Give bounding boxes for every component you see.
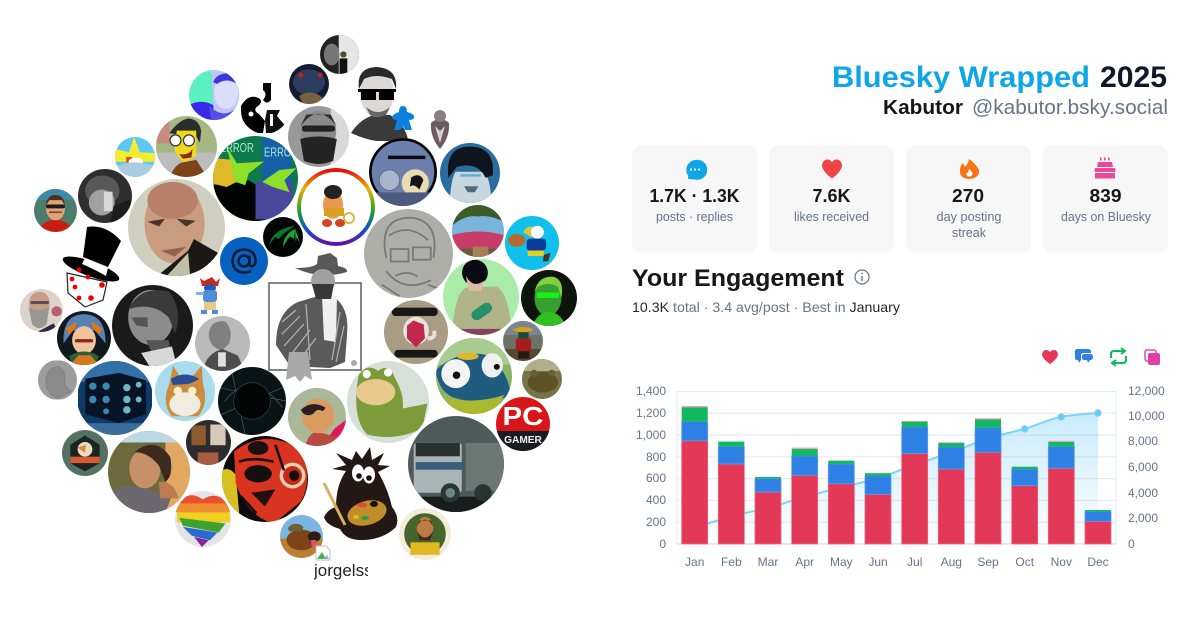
avatar: green claw error screen <box>213 136 298 221</box>
right axis labels: 10,000 <box>1128 409 1165 423</box>
left axis labels: 1,000 <box>636 428 666 442</box>
avatar: cartoon tiger <box>155 361 215 421</box>
month labels: Dec <box>1087 555 1109 569</box>
avatar: enamel cat pin <box>384 300 448 364</box>
avatar: man-at-arms cartoon <box>57 311 111 365</box>
card: likes received: 7.6K <box>812 186 850 206</box>
avatar: grey bearded man with sunglasses <box>288 106 349 167</box>
icon: blue meeple <box>392 106 414 130</box>
avatar: rainbow heart <box>175 491 231 547</box>
user name and handle: Kabutor <box>883 97 963 119</box>
panel: avatar bubble cluster <box>20 35 577 580</box>
icon: Bluey with santa hat <box>194 274 224 316</box>
icon: broken image placeholder <box>316 546 330 560</box>
month labels: Feb <box>721 555 742 569</box>
avatar: PC Gamer logo: GAMER <box>504 435 542 446</box>
avatar: green frog plush <box>347 361 429 443</box>
avatar: top hat dice <box>60 222 124 312</box>
month labels: Nov <box>1051 555 1072 569</box>
heading: your engagement: Your Engagement <box>632 265 844 292</box>
card: posts and replies: posts · replies <box>656 210 733 224</box>
user name and handle <box>883 97 1168 119</box>
avatar: bald man with aviators <box>288 388 346 446</box>
month labels: May <box>830 555 853 569</box>
card: days on Bluesky <box>1043 145 1168 253</box>
icon: grey wizard shield <box>430 110 450 149</box>
left axis labels: 400 <box>646 493 666 507</box>
right axis labels: 8,000 <box>1128 434 1158 448</box>
avatar: cartoon football ram <box>505 216 559 270</box>
right axis labels <box>1128 384 1165 551</box>
card: day posting streak: day posting <box>936 210 1002 224</box>
left axis labels: 0 <box>659 537 666 551</box>
card: days on Bluesky: days on Bluesky <box>1061 210 1152 224</box>
month labels: Aug <box>941 555 962 569</box>
icon: quotes legend <box>1145 350 1160 365</box>
icon: reposts legend <box>1111 348 1126 366</box>
chart legend icons <box>1042 348 1160 366</box>
month labels: Sep <box>977 555 999 569</box>
avatar: eagle badge <box>62 430 108 476</box>
avatar: green leaf logo <box>263 217 303 257</box>
avatar: olive toad <box>522 359 562 399</box>
avatar: at sign on blue <box>220 237 268 285</box>
avatar: grey woman with camera <box>78 169 132 223</box>
left axis labels: 200 <box>646 515 666 529</box>
engagement summary: 10.3K total · 3.4 avg/post · Best in January <box>632 299 900 315</box>
avatar: duotone purple man <box>189 70 239 120</box>
avatar: dark monster <box>289 64 329 104</box>
right axis labels: 12,000 <box>1128 384 1165 398</box>
avatar: german shepherd dog <box>280 515 323 558</box>
left axis labels: 600 <box>646 471 666 485</box>
right axis labels: 6,000 <box>1128 460 1158 474</box>
avatar: neon green skull face <box>521 270 577 326</box>
avatar: pink flowers under a tree <box>452 205 504 257</box>
icon: red heart <box>822 160 842 178</box>
icon: orange flame <box>960 159 979 179</box>
avatar: black and white ink figure <box>240 82 290 134</box>
avatar: dark sphere <box>218 367 286 435</box>
avatar: old man with grey beard <box>20 289 63 332</box>
avatar: blue bug-eyed creature <box>436 338 512 414</box>
card: day posting streak: streak <box>952 226 987 240</box>
month labels: Jul <box>907 555 922 569</box>
right axis labels: 2,000 <box>1128 511 1158 525</box>
icon: info <box>855 270 869 284</box>
card: day posting streak: 270 <box>952 186 984 206</box>
avatar: black and white face <box>320 35 359 74</box>
avatar: man with pixel sunglasses <box>351 67 408 141</box>
card: days on Bluesky: 839 <box>1090 186 1122 206</box>
avatar: PC Gamer logo: PC <box>502 403 544 431</box>
user name and handle: @kabutor.bsky.social <box>972 97 1168 119</box>
icon: speech bubble <box>686 160 707 180</box>
avatar: grey engraved portrait <box>195 316 250 371</box>
avatar: Remy Lebeau badge <box>399 508 451 560</box>
bars: replies-likes-reposts-quotes by month <box>682 406 1111 544</box>
avatar: pencil sketch <box>364 209 453 298</box>
month labels: Jan <box>685 555 704 569</box>
title: 2025 <box>1100 61 1167 94</box>
avatar: red robot mask <box>222 436 308 522</box>
avatar: glowing blue dice <box>78 361 152 435</box>
panel: wrapped stats and engagement <box>620 0 1200 630</box>
avatar: jester cartoon <box>115 137 155 177</box>
avatar: pixel art pirate <box>503 321 543 361</box>
right axis labels: 0 <box>1128 537 1135 551</box>
card: posts and replies <box>632 145 757 253</box>
avatar: man in red shirt with glasses <box>34 189 77 232</box>
left axis labels: 800 <box>646 450 666 464</box>
card: likes received: likes received <box>794 210 869 224</box>
avatar: vintage truck <box>408 416 504 512</box>
avatar: green jacket with pill <box>443 259 519 335</box>
left axis labels <box>636 384 666 551</box>
month labels: Apr <box>795 555 814 569</box>
avatar: death star porthole <box>369 138 437 206</box>
avatar: bald actor portrait <box>128 179 225 276</box>
avatar: green claw error screen: ERROR <box>220 140 254 155</box>
left axis labels: 1,400 <box>636 384 666 398</box>
avatar: PC Gamer logo <box>496 397 550 451</box>
icon: likes legend <box>1042 350 1058 364</box>
right axis labels: 4,000 <box>1128 486 1158 500</box>
avatar: blue pop art hair <box>440 143 500 203</box>
icon: replies legend <box>1075 349 1093 363</box>
avatar: man leaning on hand <box>108 431 190 513</box>
avatar: godfather portrait <box>112 285 193 366</box>
month labels <box>685 555 1109 569</box>
card: posts and replies: 1.7K · 1.3K <box>650 186 740 206</box>
avatar: man in frame sketch <box>262 250 370 384</box>
left axis labels: 1,200 <box>636 406 666 420</box>
avatar: grey caricature <box>38 360 77 400</box>
avatar: Simpsons style man <box>156 116 217 177</box>
avatar: furry monster painter <box>322 447 398 540</box>
icon: pink birthday cake <box>1094 158 1116 178</box>
avatar: rainbow ring with potato character <box>297 168 375 246</box>
card: day posting streak <box>906 145 1031 253</box>
avatar: posters on dark wall <box>186 420 231 465</box>
cumulative area and line <box>695 410 1101 544</box>
month labels: Jun <box>868 555 888 569</box>
month labels: Mar <box>758 555 778 569</box>
month labels: Oct <box>1015 555 1035 569</box>
title: Bluesky Wrapped <box>832 61 1090 94</box>
card: likes received <box>769 145 894 253</box>
stacked bar and line chart <box>636 384 1165 569</box>
